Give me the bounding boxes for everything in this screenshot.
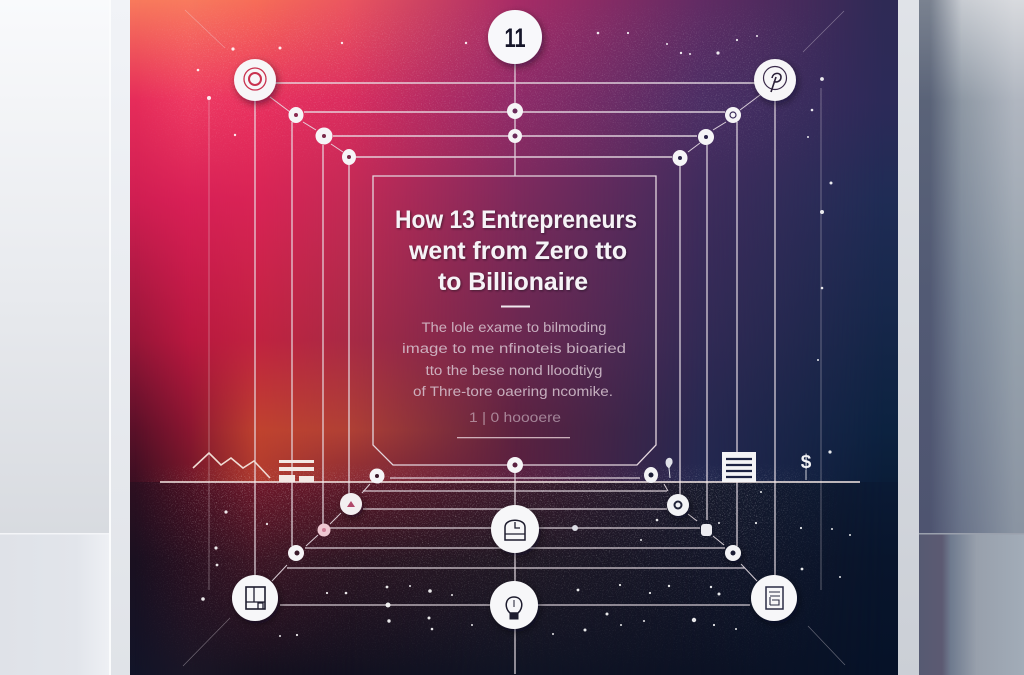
upper horizontal lines — [275, 83, 755, 157]
body text: tto the bese nond lloodtiyg — [426, 363, 602, 378]
icon: mountain chart — [193, 453, 270, 478]
node: bottom-right document icon — [751, 575, 797, 621]
background wall: left — [0, 0, 111, 675]
right diagonal connectors — [664, 95, 760, 581]
text frame rule — [457, 437, 570, 438]
body text: 1 | 0 hoooere — [469, 410, 561, 425]
thin outer vertical lines — [209, 88, 821, 590]
node: frame bottom — [507, 457, 523, 473]
node: bottom-left layout icon — [232, 575, 278, 621]
node: top-right pin icon — [754, 59, 796, 101]
title: went from Zero tto — [408, 237, 627, 265]
node: top-left target icon — [234, 59, 276, 101]
body text: image to me nfinoteis bioaried — [402, 341, 626, 356]
icon: bars stack — [279, 460, 314, 482]
small upper nodes — [288, 103, 741, 166]
title — [395, 206, 637, 296]
node: number 11: 11 — [504, 23, 526, 53]
body text — [402, 320, 626, 425]
background wall: right — [919, 0, 1024, 675]
node: centre clock icon — [491, 505, 539, 553]
body text: The lole exame to bilmoding — [422, 320, 606, 335]
horizon line — [160, 481, 860, 483]
centre text frame — [373, 176, 656, 465]
gradient poster panel — [130, 0, 898, 675]
icon: list document — [722, 452, 756, 482]
top central stem — [514, 64, 516, 674]
right vertical lines — [680, 100, 775, 576]
lower left nodes — [288, 468, 384, 561]
particle dots — [197, 32, 851, 637]
lower horizontal lines — [280, 478, 750, 605]
left vertical lines — [255, 100, 349, 576]
title: How 13 Entrepreneurs — [395, 206, 637, 234]
title: to Billionaire — [438, 268, 588, 296]
title underline — [501, 306, 530, 308]
lower right nodes — [386, 458, 741, 608]
node: bottom-centre light bulb icon — [490, 581, 538, 629]
far diagonal rays — [183, 10, 845, 666]
node: number 11 — [488, 10, 542, 64]
poster side strips — [111, 0, 919, 675]
connector network lines — [183, 10, 845, 674]
body text: of Thre-tore oaering ncomike. — [413, 384, 613, 399]
icon: dollar sign: $ — [801, 452, 812, 473]
left diagonal connectors — [270, 97, 370, 581]
